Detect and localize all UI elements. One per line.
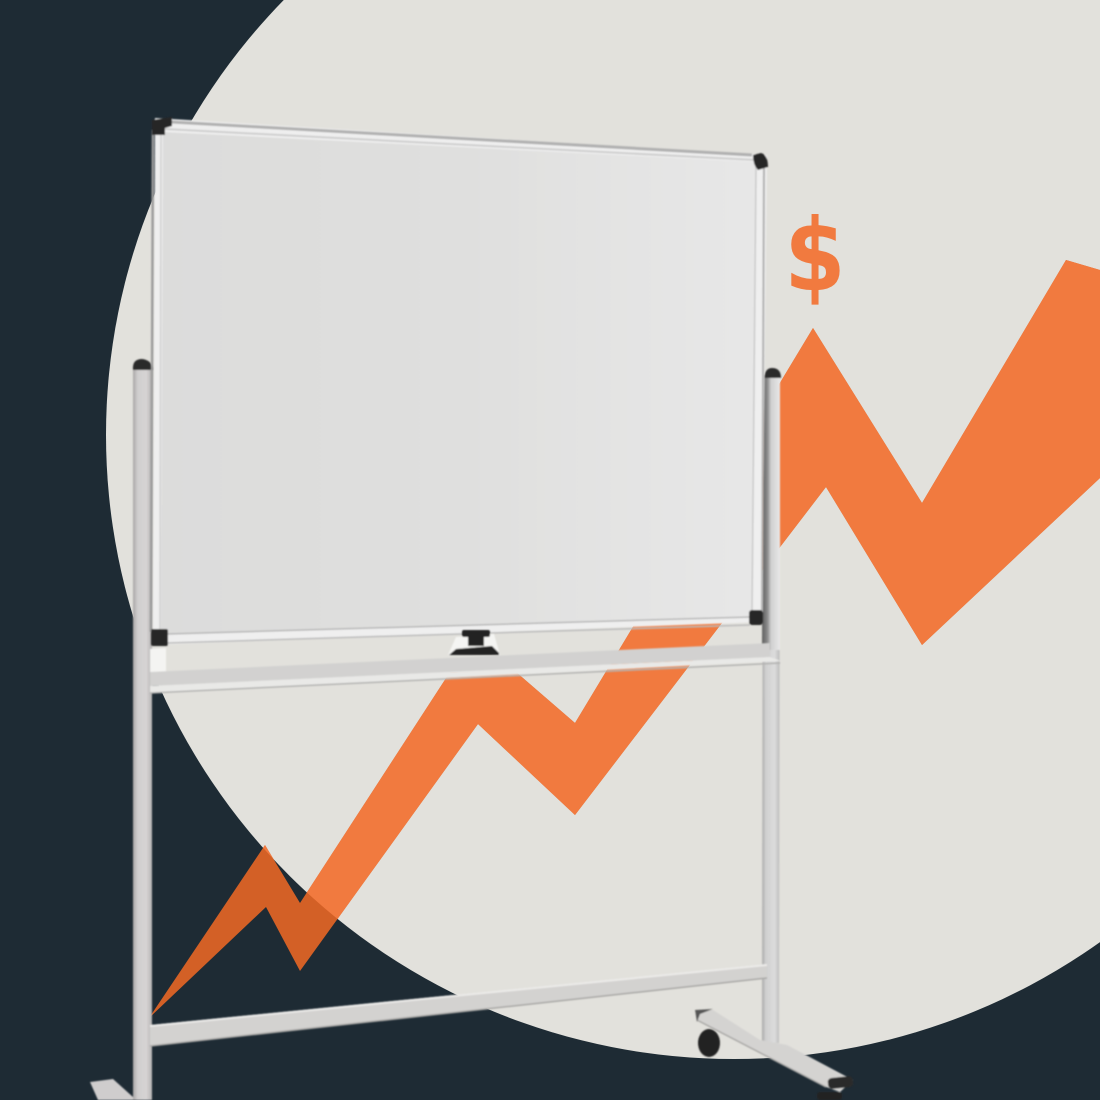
tray clip: [448, 630, 500, 655]
left pole: [133, 359, 153, 1100]
left foot: [90, 1079, 133, 1100]
marker tray: [150, 630, 781, 693]
whiteboard panel: [151, 117, 768, 646]
right pole: [762, 368, 781, 1043]
right foot with casters: [695, 1009, 853, 1100]
icon: dollar sign: $: [784, 199, 846, 314]
whiteboard stand: [90, 359, 853, 1100]
rising arrow chart: [149, 260, 1100, 1018]
lower crossbar: [150, 964, 767, 1046]
corner caps: [151, 117, 768, 646]
